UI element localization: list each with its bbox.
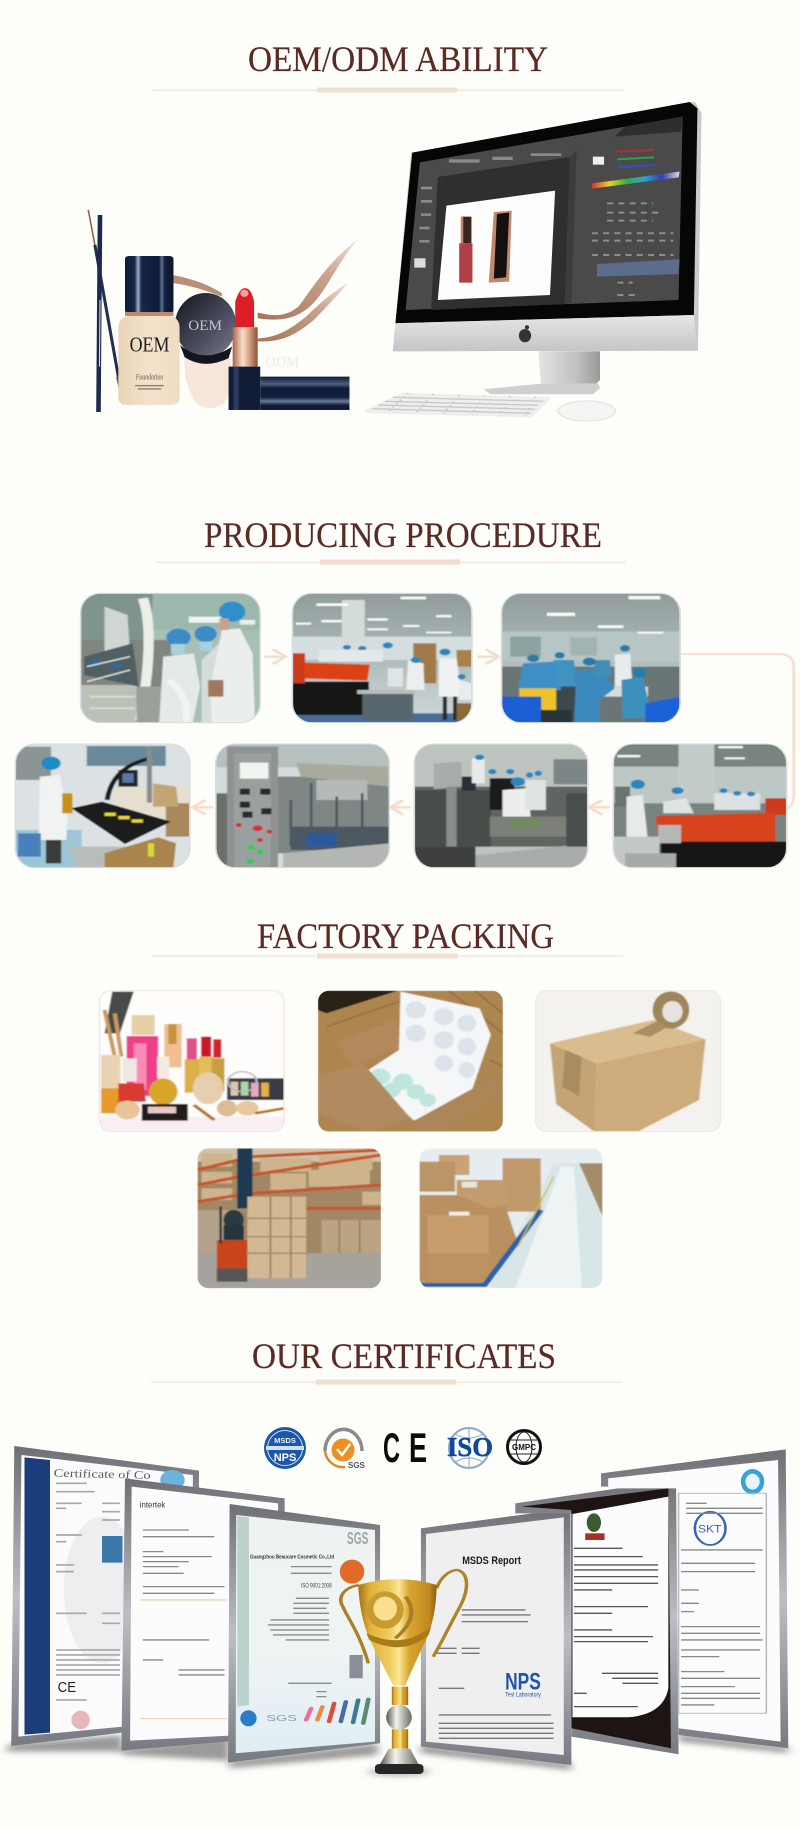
logo: MSDS NPS: MSDS [274,1436,296,1445]
logo: ISO: ISO [447,1432,493,1462]
photo: cosmetics assortment [99,991,284,1132]
photo outlines [99,991,720,1132]
heading: OUR CERTIFICATES: OUR CERTIFICATES [252,1336,556,1376]
foundation bottle: OEM [130,333,169,356]
heading rule [151,1380,622,1384]
frame: certificate of conformity [11,1446,199,1746]
heading rule [152,88,624,92]
logo: GMPC: GMPC [512,1443,536,1452]
process flow [15,593,794,868]
certificate logos [264,1424,540,1471]
frame: SGS ISO certificate [228,1504,380,1763]
photo: foam tray in carton [318,991,503,1132]
frame: intertek certificate: intertek [140,1501,166,1510]
foundation bottle [118,256,180,405]
frame: SGS ISO certificate: ISO 9001:2008 [301,1582,332,1589]
frame: MSDS report [421,1508,571,1765]
frame: SGS ISO certificate: Guangzhou Beaucare Cosmetic Co.,Ltd [250,1554,334,1560]
photo outlines [15,593,787,868]
trophy [341,1570,467,1776]
section: factory packing [99,916,720,1288]
heading: OEM/ODM ABILITY: OEM/ODM ABILITY [248,39,548,79]
keyboard [363,393,552,417]
photo: packaging machine and workers [414,744,588,868]
frame: SGS ISO certificate: SGS [266,1714,297,1723]
compact powder: OEM [188,318,222,334]
packing photos [99,991,720,1288]
section: producing procedure [15,515,794,868]
section: OEM/ODM ability [88,39,702,421]
frame: MSDS report: Test Laboratory [505,1691,541,1698]
logo: MSDS NPS: NPS [274,1452,296,1464]
photo: technicians at machinery [81,593,260,723]
logo: CE mark: C [383,1424,400,1471]
photo: warehouse forklift [197,1148,381,1288]
frame: certificate of conformity: CE [58,1680,76,1696]
frame: quality certificate: SKT [698,1523,721,1536]
frame: MSDS report: NPS [505,1668,541,1695]
logo: SGS [325,1429,366,1470]
photo: taped cardboard box [536,991,720,1132]
foundation bottle: Foundation [135,372,163,382]
logo: CE mark: E [409,1424,427,1471]
photo: warehouse aisle [419,1148,603,1288]
mouse [558,401,615,421]
connector line [681,654,794,808]
photo: workers in blue suits [502,593,680,723]
photo: line with red table 2 [613,744,787,868]
section: our certificates [5,1336,788,1776]
frame: SGS ISO certificate: SGS [347,1529,368,1548]
monitor [393,102,702,351]
illustration: cosmetics and computer [88,102,702,421]
monitor stand [484,351,600,394]
arrows [193,649,610,815]
faint ODM mark: ODM [265,354,299,370]
photo: worker at conveyor [15,744,190,868]
lipstick [229,288,349,410]
logo: MSDS NPS [264,1427,306,1469]
photo: production line with red table [292,593,472,723]
frame: MSDS report: MSDS Report [462,1555,521,1567]
heading rule [155,560,626,564]
frame: black-border certificate [515,1480,679,1754]
frame: intertek certificate [121,1478,285,1751]
ribbon [173,239,358,341]
logo: SGS: SGS [348,1461,366,1470]
logo: CE mark [383,1424,427,1471]
heading: FACTORY PACKING: FACTORY PACKING [257,916,554,956]
icon: apple logo [519,325,531,342]
logo: GMPC [508,1430,540,1464]
heading rule [152,954,623,958]
certificate frames [5,1446,788,1776]
compact powder [175,293,236,408]
frame: quality certificate [601,1449,788,1748]
pencils [88,210,124,412]
frame: certificate of conformity: Certificate of Co [53,1467,151,1482]
frame shadows [5,1734,788,1770]
heading: PRODUCING PROCEDURE: PRODUCING PROCEDURE [204,515,602,555]
photo: control panel and machinery [216,744,389,868]
